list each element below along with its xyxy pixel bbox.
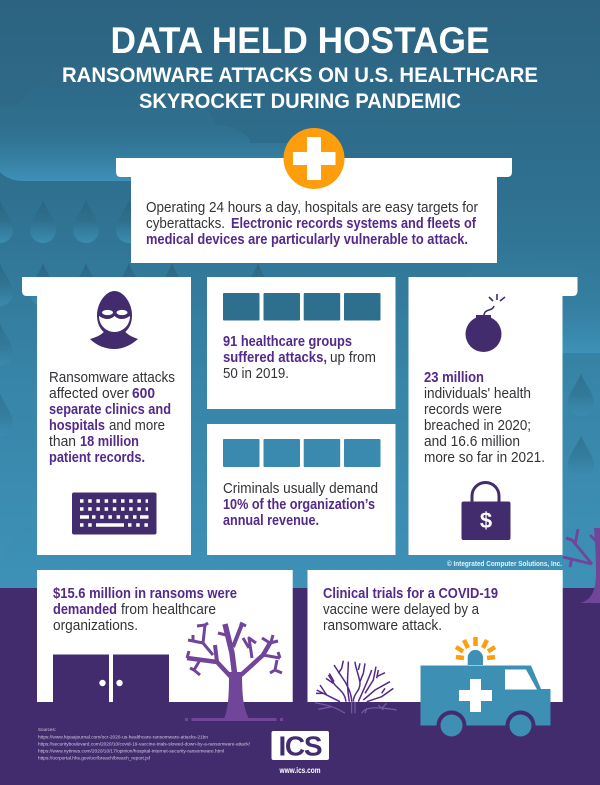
copyright: © Integrated Computer Solutions, Inc.	[447, 560, 562, 568]
stat text: Clinical trials for a COVID-19	[323, 586, 498, 602]
sources: Sources:	[38, 727, 56, 733]
stat text: demanded	[53, 602, 117, 618]
icon: ambulance	[420, 637, 550, 740]
siren rays	[456, 637, 495, 658]
stat text: Criminals usually demand	[223, 481, 378, 497]
panel: intro	[116, 128, 512, 263]
stat text: separate clinics and	[49, 402, 171, 418]
tree: right edge	[563, 528, 600, 603]
purple ground	[0, 588, 600, 785]
sources: https://ocrportal.hhs.gov/ocr/breach/breach_report.jsf	[38, 756, 151, 762]
stat text	[323, 586, 498, 634]
stat text: patient records.	[49, 450, 145, 466]
stat text: $15.6 million in ransoms were	[53, 586, 237, 602]
stat text: 10% of the organization’s	[223, 497, 375, 513]
intro text: cyberattacks.	[146, 216, 225, 232]
stat text	[223, 334, 376, 382]
stat text: breached in 2020;	[424, 418, 531, 434]
icon: hospital doors	[53, 654, 169, 702]
stat text: hospitals	[49, 418, 105, 434]
stat text	[223, 481, 378, 529]
bush	[315, 661, 397, 713]
stat text: ransomware attack.	[323, 618, 442, 634]
stat text: and 16.6 million	[424, 434, 520, 450]
intro text: medical devices are particularly vulnerable to attack.	[146, 232, 468, 248]
intro text	[146, 200, 478, 248]
stat text: 91 healthcare groups	[223, 334, 352, 350]
website: www.ics.com	[279, 766, 320, 775]
panel: ransom amount	[37, 570, 293, 702]
stat text: annual revenue.	[223, 513, 319, 529]
subtitle: SKYROCKET DURING PANDEMIC	[139, 90, 461, 113]
icon: orange medical cross	[284, 128, 344, 189]
logo: ICS: ICS	[278, 730, 322, 762]
stat text: vaccine were delayed by a	[323, 602, 480, 618]
stat text: from healthcare	[121, 602, 216, 618]
stat text: records were	[424, 402, 502, 418]
stat text: more so far in 2021.	[424, 450, 545, 466]
icon: padlock with dollar	[462, 482, 510, 540]
stat text: individuals' health	[424, 386, 531, 402]
icon: padlock with dollar: $	[480, 508, 492, 533]
stat text: and more	[109, 418, 165, 434]
panel: healthcare groups	[207, 277, 396, 409]
subtitle	[62, 64, 538, 113]
stat text: 50 in 2019.	[223, 366, 289, 382]
stat text: than	[49, 434, 76, 450]
background sky	[0, 0, 600, 590]
title: DATA HELD HOSTAGE	[110, 20, 490, 61]
panel: health records	[408, 277, 578, 555]
stat text: Ransomware attacks	[49, 370, 175, 386]
data blocks	[223, 439, 380, 467]
icon: bomb	[466, 294, 505, 352]
panel: clinical trials	[308, 570, 563, 702]
intro text: Operating 24 hours a day, hospitals are easy targets for	[146, 200, 478, 216]
panel: ransomware attacks	[22, 277, 191, 555]
tree: bare purple tree	[187, 623, 282, 719]
sources: https://securityboulevard.com/2020/10/covid-19-vaccine-trials-slowed-down-by-a-ransomware-attack/	[38, 742, 251, 748]
tree ground line	[185, 718, 283, 721]
stat text	[424, 370, 545, 466]
stat text	[49, 370, 175, 466]
data blocks	[223, 293, 380, 320]
stat text: affected over	[49, 386, 129, 402]
icon: keyboard	[72, 492, 156, 534]
sources: https://www.hipaajournal.com/ocr-2020-us-healthcare-ransomware-attacks-21bn	[38, 734, 208, 740]
sources: https://www.nytimes.com/2020/10/17/opinion/hospital-internet-security-ransomware.html	[38, 748, 224, 754]
stat text: up from	[330, 350, 376, 366]
stat text: 23 million	[424, 370, 484, 386]
intro text: Electronic records systems and fleets of	[231, 216, 476, 232]
stat text	[53, 586, 237, 634]
stat text: 18 million	[80, 434, 139, 450]
stat text: organizations.	[53, 618, 138, 634]
stat text: 600	[132, 386, 155, 402]
sources	[38, 727, 251, 762]
stat text: suffered attacks,	[223, 350, 327, 366]
subtitle: RANSOMWARE ATTACKS ON U.S. HEALTHCARE	[62, 64, 538, 87]
panel: ransom demand	[207, 424, 396, 555]
icon: hooded hacker	[90, 291, 138, 349]
